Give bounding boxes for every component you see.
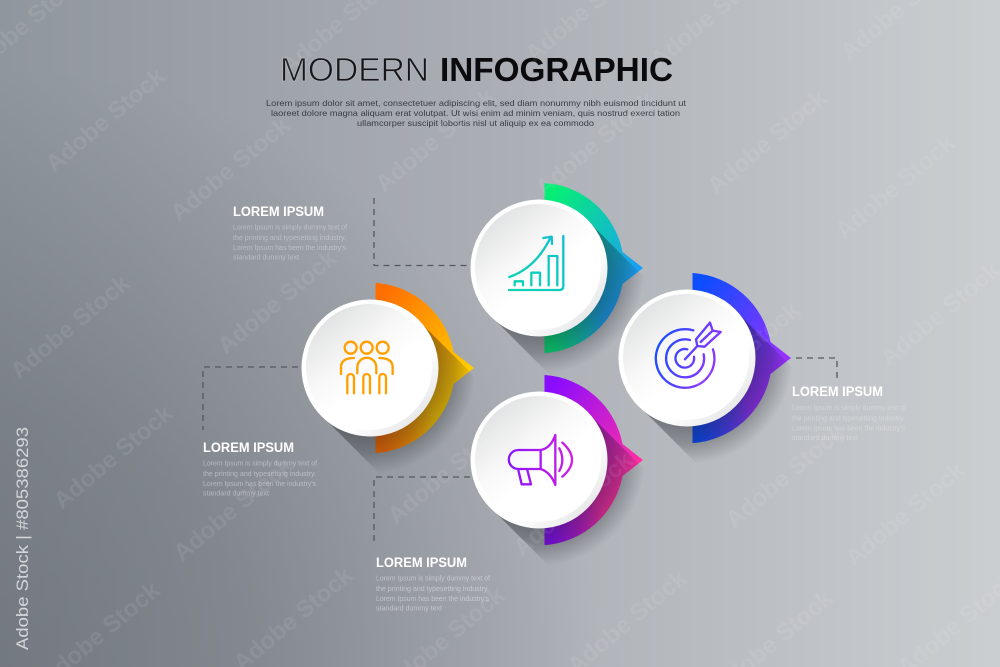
white disc — [618, 290, 756, 426]
text block: bottom: LOREM IPSUM — [376, 555, 467, 570]
long shadow — [491, 412, 663, 584]
text block: right: Lorem Ipsum is simply dummy text of — [792, 403, 907, 412]
text block: left: standard dummy text — [203, 488, 269, 498]
node: target — [618, 273, 811, 482]
subtitle: ullamcorper suscipit lobortis nisl ut aliquip ex ea commodo — [357, 118, 594, 128]
dashed connector: target — [796, 358, 837, 382]
node: growth — [470, 183, 663, 392]
text block: top left: LOREM IPSUM — [233, 204, 324, 219]
white disc — [470, 200, 608, 336]
stock watermarks: Adobe Stock — [168, 451, 299, 567]
stock watermarks: Adobe Stock — [40, 62, 171, 178]
text block: top left: Lorem Ipsum is simply dummy text of — [233, 222, 348, 232]
white disc — [470, 392, 608, 528]
text block: top left: standard dummy text — [233, 252, 299, 262]
stock watermarks: Adobe Stock — [720, 418, 851, 534]
dashed connector: growth — [374, 198, 470, 266]
icon: bullseye with arrow — [656, 323, 721, 388]
orange arc with pointer — [376, 283, 474, 453]
text block: top left: the printing and typesetting industry. — [233, 233, 346, 242]
text block: top left: Lorem Ipsum has been the industry's — [233, 243, 346, 252]
text block: bottom: standard dummy text — [376, 604, 442, 612]
text block: left: the printing and typesetting industry. — [203, 469, 316, 478]
text block: right: standard dummy text — [792, 433, 858, 442]
title — [280, 51, 673, 88]
stock watermarks: Adobe Stock — [508, 446, 639, 562]
text block: right: the printing and typesetting industry. — [792, 414, 905, 422]
stock watermarks: Adobe Stock — [840, 456, 971, 572]
title: MODERN — [280, 51, 429, 88]
long shadow — [639, 310, 811, 482]
text block: right — [792, 384, 907, 442]
subtitle — [266, 98, 687, 128]
text block: bottom: the printing and typesetting industry. — [376, 584, 489, 593]
text block: left — [203, 440, 318, 498]
long shadow — [322, 320, 494, 492]
stock watermarks: Adobe Stock — [48, 399, 179, 515]
dashed connector: team — [203, 367, 298, 430]
stock watermarks: Adobe Stock — [370, 82, 501, 198]
green arc with pointer — [544, 183, 643, 353]
long shadow — [491, 220, 663, 392]
subtitle: laoreet dolore magna aliquam erat volutpat. Ut wisi enim ad minim veniam, quis nostrud exerci tation — [271, 108, 680, 118]
stock watermarks: Adobe Stock — [702, 84, 833, 200]
text block: bottom: Lorem Ipsum is simply dummy text of — [376, 574, 491, 582]
text block: right: Lorem Ipsum has been the industry's — [792, 424, 905, 432]
text block: top left — [233, 204, 348, 262]
stock watermarks: Adobe Stock — [675, 296, 806, 412]
icon: megaphone — [509, 435, 572, 485]
text block: left: LOREM IPSUM — [203, 440, 294, 455]
text block: bottom: Lorem Ipsum has been the industry's — [376, 594, 489, 603]
white disc — [302, 300, 438, 436]
dashed connector: marketing — [374, 477, 470, 545]
stock watermarks: Adobe Stock — [382, 414, 513, 530]
stock watermarks: Adobe Stock — [5, 269, 136, 385]
stock watermarks: Adobe Stock — [530, 86, 661, 202]
stock watermarks: Adobe Stock — [165, 111, 296, 227]
subtitle: Lorem ipsum dolor sit amet, consectetuer adipiscing elit, sed diam nonummy nibh euismod tincidunt ut — [266, 98, 687, 108]
icon: rising chart — [509, 236, 563, 290]
node: team — [302, 283, 494, 492]
blue arc with pointer — [692, 273, 791, 443]
stock watermarks: Adobe Stock — [212, 244, 343, 360]
text block: left: Lorem Ipsum has been the industry's — [203, 479, 316, 488]
title: INFOGRAPHIC — [440, 51, 673, 88]
text block: left: Lorem Ipsum is simply dummy text of — [203, 458, 318, 468]
icon: people — [341, 342, 393, 393]
stock watermarks: Adobe Stock — [830, 129, 961, 245]
side credit: Adobe Stock | #805386293 — [13, 427, 32, 650]
node: marketing — [470, 375, 663, 584]
text block: bottom — [376, 555, 491, 612]
magenta arc with pointer — [544, 375, 643, 545]
text block: right: LOREM IPSUM — [792, 384, 883, 399]
